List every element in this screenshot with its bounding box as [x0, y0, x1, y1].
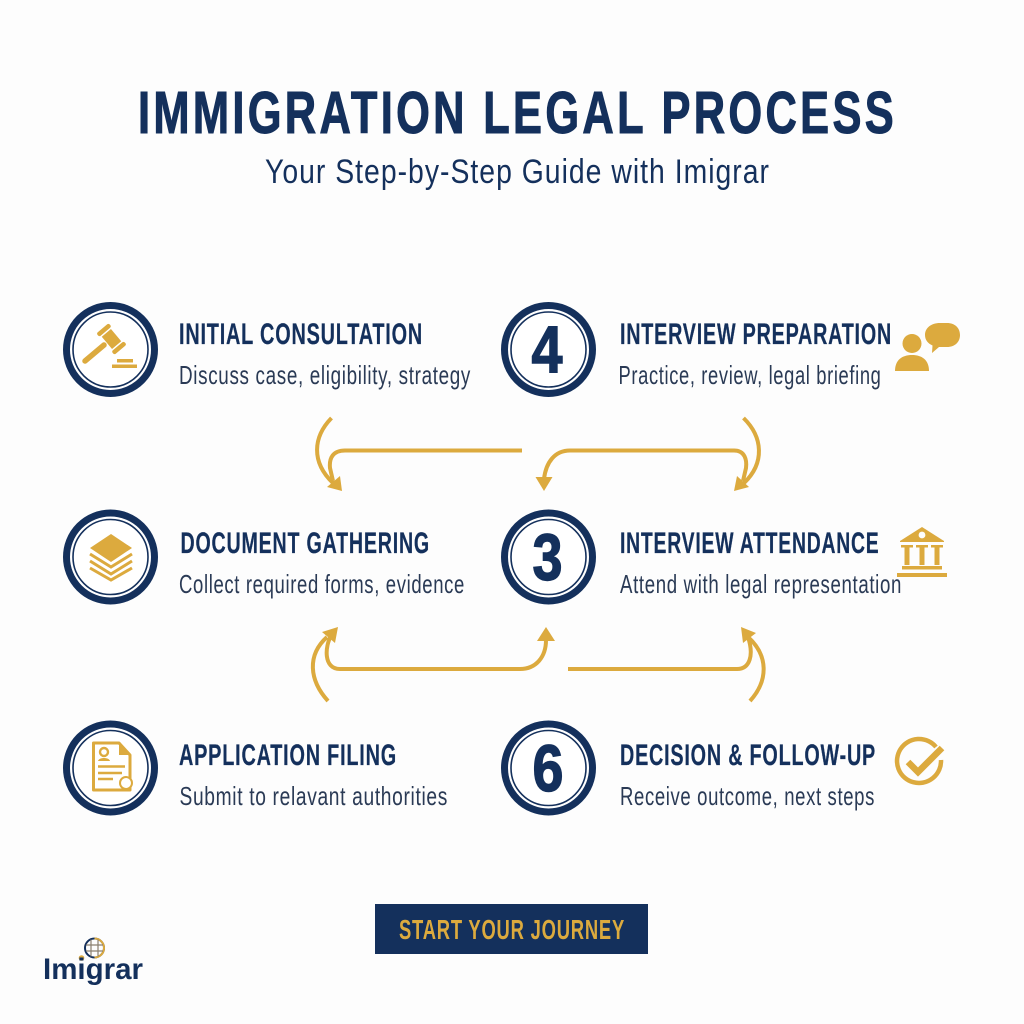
badge: number 4 — [504, 306, 592, 394]
arrow: preparation to interview — [734, 418, 759, 491]
heading: INTERVIEW PREPARATION — [620, 318, 892, 351]
badge: number 4: 4 — [532, 312, 563, 386]
logo: Imigrar — [43, 938, 143, 986]
description: Receive outcome, next steps — [620, 781, 875, 811]
arrow: decision to interview attendance — [568, 627, 764, 701]
panel: step 3 interview attendance — [504, 513, 947, 601]
logo: Imigrar: Imigrar — [43, 953, 143, 986]
heading: DECISION & FOLLOW-UP — [620, 739, 876, 772]
button: start your journey — [375, 904, 648, 954]
subtitle: Your Step-by-Step Guide with Imigrar — [265, 153, 770, 191]
panel: step 6 decision and follow-up — [504, 724, 942, 812]
description: Attend with legal representation — [620, 569, 902, 599]
icon: check mark circle — [897, 739, 942, 783]
badge: number 3: 3 — [532, 520, 562, 594]
button: start your journey: START YOUR JOURNEY — [399, 914, 625, 945]
icon: gavel badge — [66, 306, 154, 394]
heading: INTERVIEW ATTENDANCE — [620, 527, 880, 560]
arrow: to step 3 — [536, 450, 746, 491]
panel: step application filing — [66, 724, 448, 812]
heading: INITIAL CONSULTATION — [179, 318, 423, 351]
badge: number 6 — [504, 724, 592, 812]
description: Submit to relavant authorities — [180, 781, 448, 811]
heading: DOCUMENT GATHERING — [180, 527, 430, 560]
description: Collect required forms, evidence — [179, 569, 465, 599]
icon: person with speech bubble — [895, 323, 960, 371]
icon: document stack badge — [66, 513, 154, 601]
arrow: filing to document gathering — [313, 627, 338, 701]
panel: step 4 interview preparation — [504, 306, 960, 394]
icon: application document badge — [66, 724, 154, 812]
description: Discuss case, eligibility, strategy — [179, 360, 471, 390]
panel: step document gathering — [66, 513, 465, 601]
description: Practice, review, legal briefing — [618, 360, 882, 390]
arrow: consultation to document gathering — [317, 418, 522, 491]
icon: courthouse — [897, 527, 947, 577]
badge: number 6: 6 — [532, 731, 564, 805]
icon: globe — [79, 938, 104, 961]
arrow: to step 3 from document side — [327, 627, 555, 669]
heading: APPLICATION FILING — [179, 739, 397, 772]
panel: step initial consultation — [66, 306, 471, 394]
badge: number 3 — [504, 513, 592, 601]
